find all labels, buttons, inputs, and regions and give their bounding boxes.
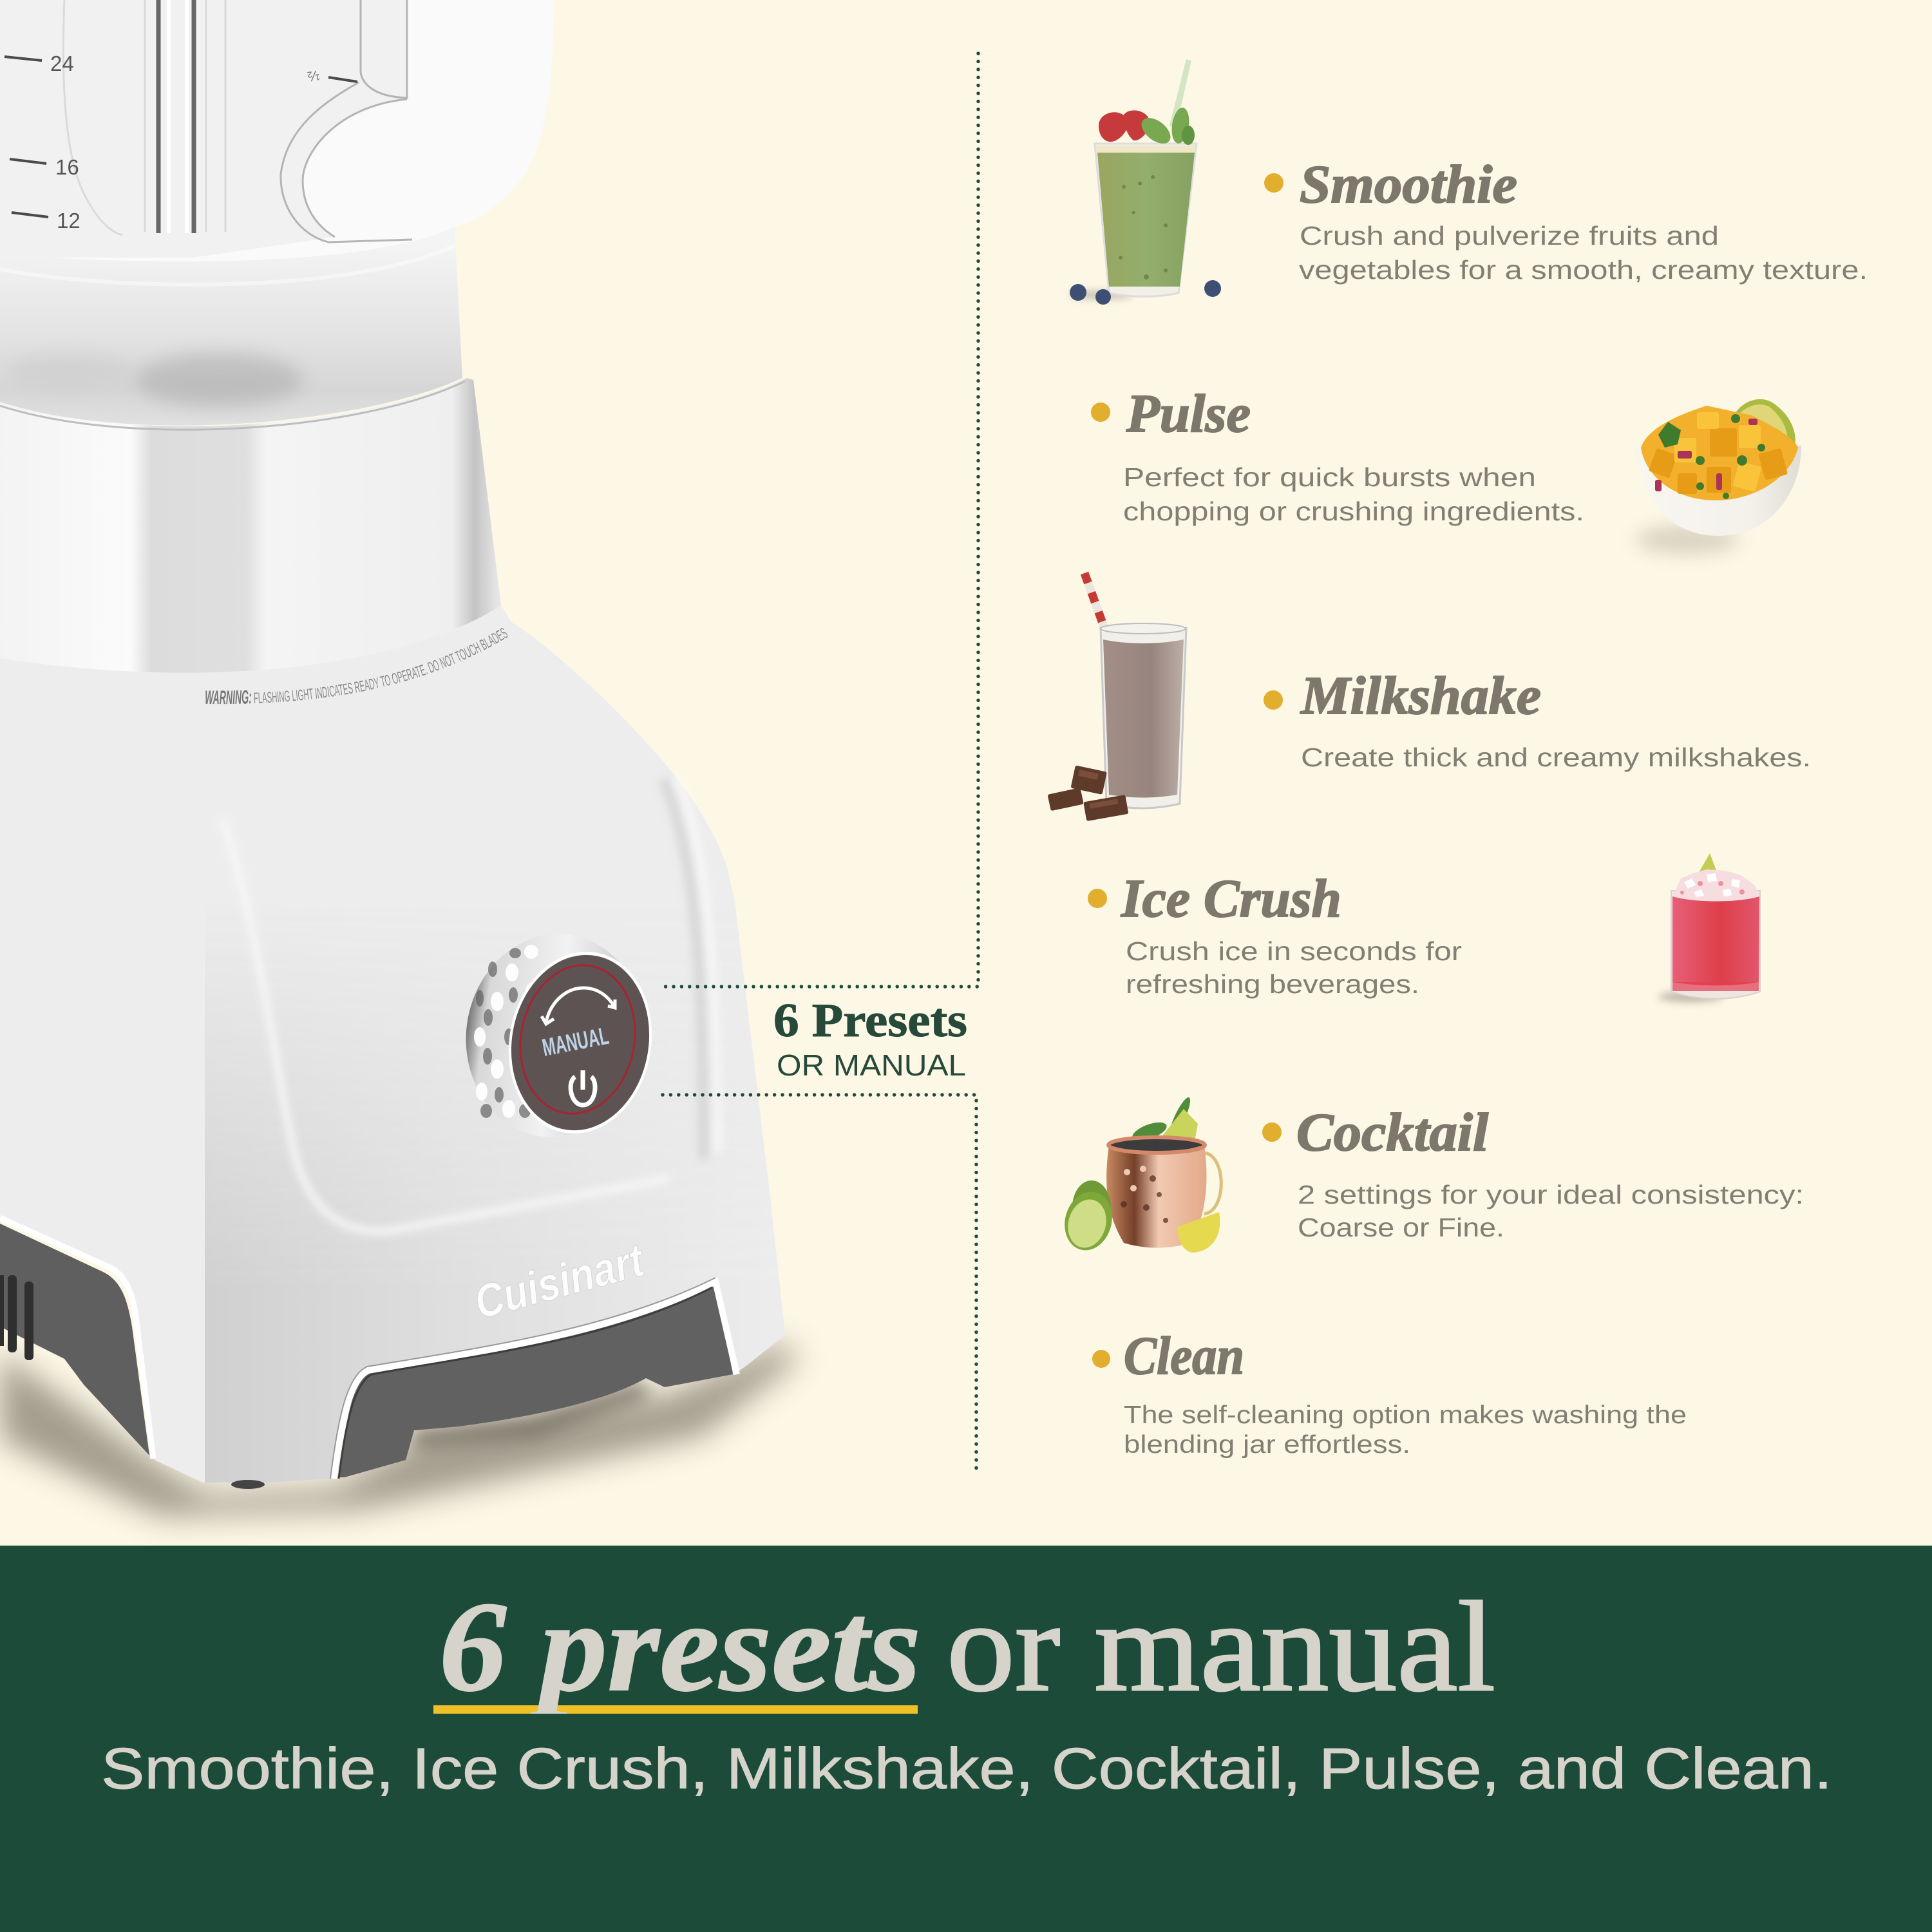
bullet	[1088, 889, 1107, 908]
panel: bottom banner	[0, 1546, 1932, 1932]
description	[1124, 1401, 1687, 1459]
icon: mango salsa bowl	[1636, 399, 1801, 554]
banner heading	[443, 1600, 1494, 1714]
description: chopping or crushing ingredients.	[1123, 497, 1584, 526]
dial red ring	[509, 956, 647, 1123]
measurement mark 24: 24	[50, 52, 74, 75]
chrome trim	[0, 1218, 737, 1479]
measurement mark 12	[12, 209, 80, 232]
measurement mark fraction: ½	[307, 67, 321, 85]
bullet	[1092, 1350, 1110, 1368]
description: Crush and pulverize fruits and	[1300, 221, 1719, 251]
description: 2 settings for your ideal consistency:	[1298, 1180, 1804, 1209]
description	[1123, 462, 1584, 526]
blender jar	[0, 0, 554, 283]
dial MANUAL label: MANUAL	[540, 1023, 611, 1062]
description: vegetables for a smooth, creamy texture.	[1299, 255, 1868, 285]
banner background	[0, 1546, 1932, 1932]
blender floor shadow	[0, 1343, 799, 1517]
heading: Smoothie: Smoothie	[1300, 155, 1517, 214]
body recess contour	[222, 818, 670, 1231]
brand logo Cuisinart: Cuisinart	[469, 1234, 651, 1329]
bullet	[1262, 1122, 1282, 1142]
rear vent housing	[0, 1224, 149, 1455]
description	[1126, 936, 1462, 999]
description: Coarse or Fine.	[1298, 1213, 1504, 1242]
center jar ribs	[158, 0, 194, 233]
description: Perfect for quick bursts when	[1123, 462, 1536, 492]
heading: Pulse: Pulse	[1126, 384, 1251, 444]
dotted connector lines	[663, 53, 978, 1475]
banner heading: 6 presets	[439, 1576, 921, 1718]
description: The self-cleaning option makes washing the	[1124, 1401, 1687, 1429]
description: blending jar effortless.	[1124, 1431, 1410, 1459]
yellow underline	[433, 1705, 918, 1714]
control dial	[453, 922, 666, 1149]
description	[1298, 1180, 1804, 1242]
preset: Ice Crush	[1088, 853, 1760, 1002]
panel: blender product photo	[0, 0, 819, 1537]
bullet	[1091, 402, 1110, 422]
preset: Smoothie	[1069, 59, 1868, 305]
dial face	[498, 944, 663, 1141]
icon: smoothie glass	[1069, 59, 1221, 305]
description	[1299, 221, 1868, 285]
preset: Clean	[1092, 1326, 1687, 1459]
preset: Cocktail	[1058, 1095, 1804, 1256]
measurement mark 16: 16	[55, 155, 79, 179]
banner heading: or manual	[947, 1576, 1495, 1718]
description: Create thick and creamy milkshakes.	[1301, 743, 1811, 772]
icon: milkshake glass	[1048, 573, 1186, 821]
measurement mark 16	[10, 155, 79, 179]
icon: copper mug cocktail	[1058, 1095, 1221, 1256]
notch inner shadow	[412, 1388, 646, 1439]
banner subheading: Smoothie, Ice Crush, Milkshake, Cocktail, Pulse, and Clean.	[101, 1737, 1832, 1801]
heading: Cocktail: Cocktail	[1296, 1103, 1489, 1162]
measurement mark 12: 12	[57, 209, 80, 232]
icon: red crushed ice drink	[1658, 853, 1760, 1002]
heading: Milkshake: Milkshake	[1300, 666, 1541, 726]
callout: 6 presets or manual: 6 Presets	[773, 994, 967, 1047]
callout: 6 presets or manual: OR MANUAL	[777, 1048, 966, 1082]
measurement mark fraction	[307, 67, 357, 85]
bullet	[1264, 173, 1283, 193]
description: refreshing beverages.	[1126, 969, 1419, 999]
description: Crush ice in seconds for	[1126, 936, 1462, 966]
dial arrow	[542, 988, 615, 1024]
callout: 6 presets or manual	[773, 994, 967, 1082]
preset: Pulse	[1091, 384, 1801, 554]
preset: Milkshake	[1048, 573, 1811, 821]
motor base body	[0, 605, 785, 1482]
measurement mark 24	[5, 52, 74, 75]
foot	[231, 1480, 265, 1489]
jar handle	[281, 0, 412, 242]
front base recess	[339, 1282, 733, 1477]
heading: Clean: Clean	[1124, 1326, 1244, 1386]
bullet	[1264, 690, 1283, 710]
heading: Ice Crush: Ice Crush	[1121, 869, 1341, 929]
icon: power	[571, 1070, 595, 1105]
motor base ring	[0, 378, 501, 673]
frosted collar	[0, 227, 462, 426]
background	[0, 0, 1932, 1546]
warning label: WARNING: FLASHING LIGHT INDICATES READY TO OPERATE. DO NOT TOUCH BLADES	[205, 628, 507, 705]
